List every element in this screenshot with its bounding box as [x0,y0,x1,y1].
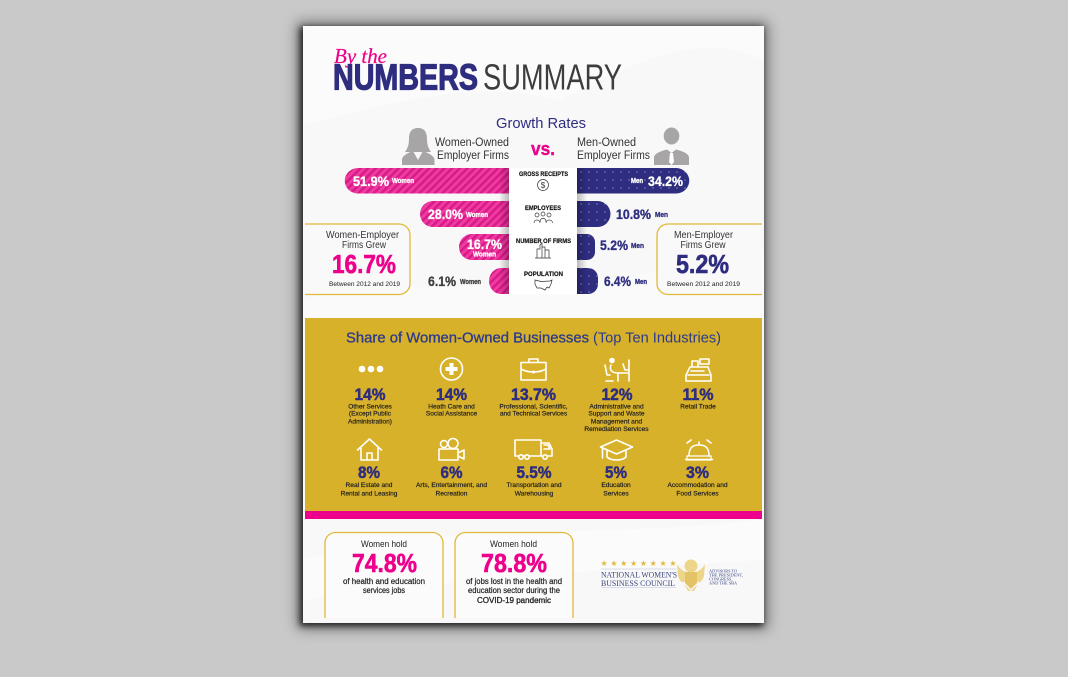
item: retail trade [680,359,716,410]
gross receipts: $ [541,181,546,190]
item: professional services: and Technical Services [500,410,568,418]
callout: 74.8 percent: of health and education [343,577,425,586]
section heading: (Top Ten Industries) [593,330,721,346]
item: education: Education [601,482,631,489]
callout: 78.8 percent: COVID-19 pandemic [477,596,551,605]
item: arts [416,438,487,498]
item: transportation: Transportation and [506,482,562,489]
item: arts: Arts, Entertainment, and [416,482,487,489]
item: transportation [506,440,562,498]
callout: 74.8 percent: 74.8% [352,548,417,578]
gross receipts: GROSS RECEIPTS [519,171,569,178]
callout: 74.8 percent: Women hold [361,539,407,549]
item: administrative: 12% [602,385,632,404]
bar label: women 6.1 [428,273,481,289]
callout: women-employer firms: Firms Grew [342,240,387,251]
bar label: men 5.2: 5.2% [600,237,628,253]
callout: women-employer firms: 16.7% [332,249,396,279]
item: education: 5% [605,463,627,482]
item: accommodation: Accommodation and [667,482,728,489]
panel: share of women-owned businesses [305,318,762,519]
item: administrative: Administrative and [589,404,644,410]
callout: 78.8 percent: 78.8% [481,548,547,578]
bar label: men 34.2: Men [631,178,643,185]
bar label: women 51.9: Women [392,178,414,185]
item: other services: Other Services [348,404,393,410]
employees: EMPLOYEES [525,205,562,212]
bar label: men 10.8: 10.8% [616,206,651,222]
callout: 74.8 percent [325,532,443,618]
bar label: men 34.2: 34.2% [648,173,683,189]
callout: women-employer firms: Between 2012 and 2019 [329,281,400,288]
bar label: women 28.0: Women [466,212,488,219]
item: accommodation [667,440,728,498]
item: education [600,440,632,498]
item: retail trade: Retail Trade [680,404,716,410]
heading: growth rates: Growth Rates [496,115,586,132]
bar label: men 10.8: Men [655,212,668,219]
item: transportation: 5.5% [516,463,552,482]
bar label: women 16.7 [467,236,502,258]
item: other services: 14% [354,385,386,404]
item: administrative: Support and Waste [588,410,645,418]
bar label: women 16.7: 16.7% [467,236,502,252]
item: health care [426,358,477,418]
item: real estate: Real Estate and [346,482,393,489]
bar label: men 6.4: 6.4% [604,273,631,289]
label: men-owned employer firms: Men-Owned [577,137,636,149]
section heading [346,330,721,346]
logo: national women's business council: NATIONAL WOMEN'S [601,570,677,580]
item: professional services: Professional, Scientific, [499,404,568,410]
gross receipts [519,171,569,190]
item: arts: Recreation [436,490,468,498]
versus label: vs. [531,139,555,159]
men bars [577,168,689,294]
item: transportation: Warehousing [515,490,554,498]
item: health care: Heath Care and [428,404,475,410]
item: education: Services [603,490,629,498]
callout: men-employer firms: Between 2012 and 2019 [667,281,740,288]
bar label: men 34.2 [631,173,683,189]
logo: national women's business council: BUSINESS COUNCIL [601,578,675,588]
label: women-owned employer firms [435,137,509,162]
bar label: men 5.2: Men [631,243,644,250]
advisors text: AND THE SBA [709,580,738,586]
item: arts: 6% [440,463,462,482]
bar label: women 51.9: 51.9% [353,173,389,189]
advisors text: THE PRESIDENT, [709,572,743,578]
item: retail trade: 11% [682,385,714,404]
item: other services [348,366,393,426]
callout: women-employer firms: Women-Employer [326,230,400,241]
callout: 78.8 percent [455,532,573,618]
item: other services: Administration) [348,418,392,426]
label: men-owned employer firms: Employer Firms [577,150,650,162]
callout: women-employer firms [305,224,410,295]
section heading: Share of Women-Owned Businesses [346,330,589,346]
item: accommodation: 3% [686,463,709,482]
advisors text: CONGRESS, [709,576,733,582]
bar label: women 6.1: 6.1% [428,273,456,289]
number of firms: NUMBER OF FIRMS [516,238,572,245]
label: men-owned employer firms [577,137,650,162]
seal [677,560,705,591]
bar label: men 6.4: Men [635,279,647,286]
page sheet [303,26,764,623]
title [333,44,622,98]
item: administrative: Remediation Services [584,426,649,433]
advisors text [709,568,743,586]
women bars [345,168,509,294]
callout: 74.8 percent: services jobs [363,586,405,595]
callout: men-employer firms: 5.2% [676,249,729,279]
callout: 78.8 percent: of jobs lost in the health and [466,577,562,586]
callout: men-employer firms: Firms Grew [680,240,726,251]
logo: national women's business council: ★★★★★★★★ [600,559,676,568]
item: real estate: Rental and Leasing [341,490,398,498]
item: administrative [584,358,649,433]
population: POPULATION [524,271,563,278]
bar label: women 28.0: 28.0% [428,206,463,222]
callout: men-employer firms [657,224,762,295]
item: real estate: 8% [358,463,380,482]
item: accommodation: Food Services [676,490,719,498]
item: professional services: 13.7% [511,385,556,404]
item: other services: (Except Public [349,410,392,418]
icon: woman [402,128,434,165]
item: real estate [341,439,398,498]
callout: men-employer firms: Men-Employer [674,230,734,241]
bar label: women 6.1: Women [460,279,481,286]
bar label: women 28.0 [428,206,488,222]
callout: 78.8 percent: Women hold [490,539,537,549]
item: professional services [499,359,568,418]
bar label: women 16.7: Women [473,252,496,258]
center column [509,168,577,294]
advisors text: ADVISORS TO [709,568,737,574]
label: women-owned employer firms: Employer Firms [437,150,509,162]
icon: man [654,128,689,165]
title: SUMMARY [483,56,622,98]
callout: 78.8 percent: education sector during the [468,586,561,595]
bar label: women 51.9 [353,173,414,189]
item: health care: 14% [436,385,467,404]
chart: growth rate bars [345,168,689,294]
title: NUMBERS [333,56,478,98]
item: administrative: Management and [591,418,642,426]
label: women-owned employer firms: Women-Owned [435,137,509,149]
item: health care: Social Assistance [426,410,477,418]
logo: national women's business council [600,559,743,591]
title: By the [334,44,387,68]
